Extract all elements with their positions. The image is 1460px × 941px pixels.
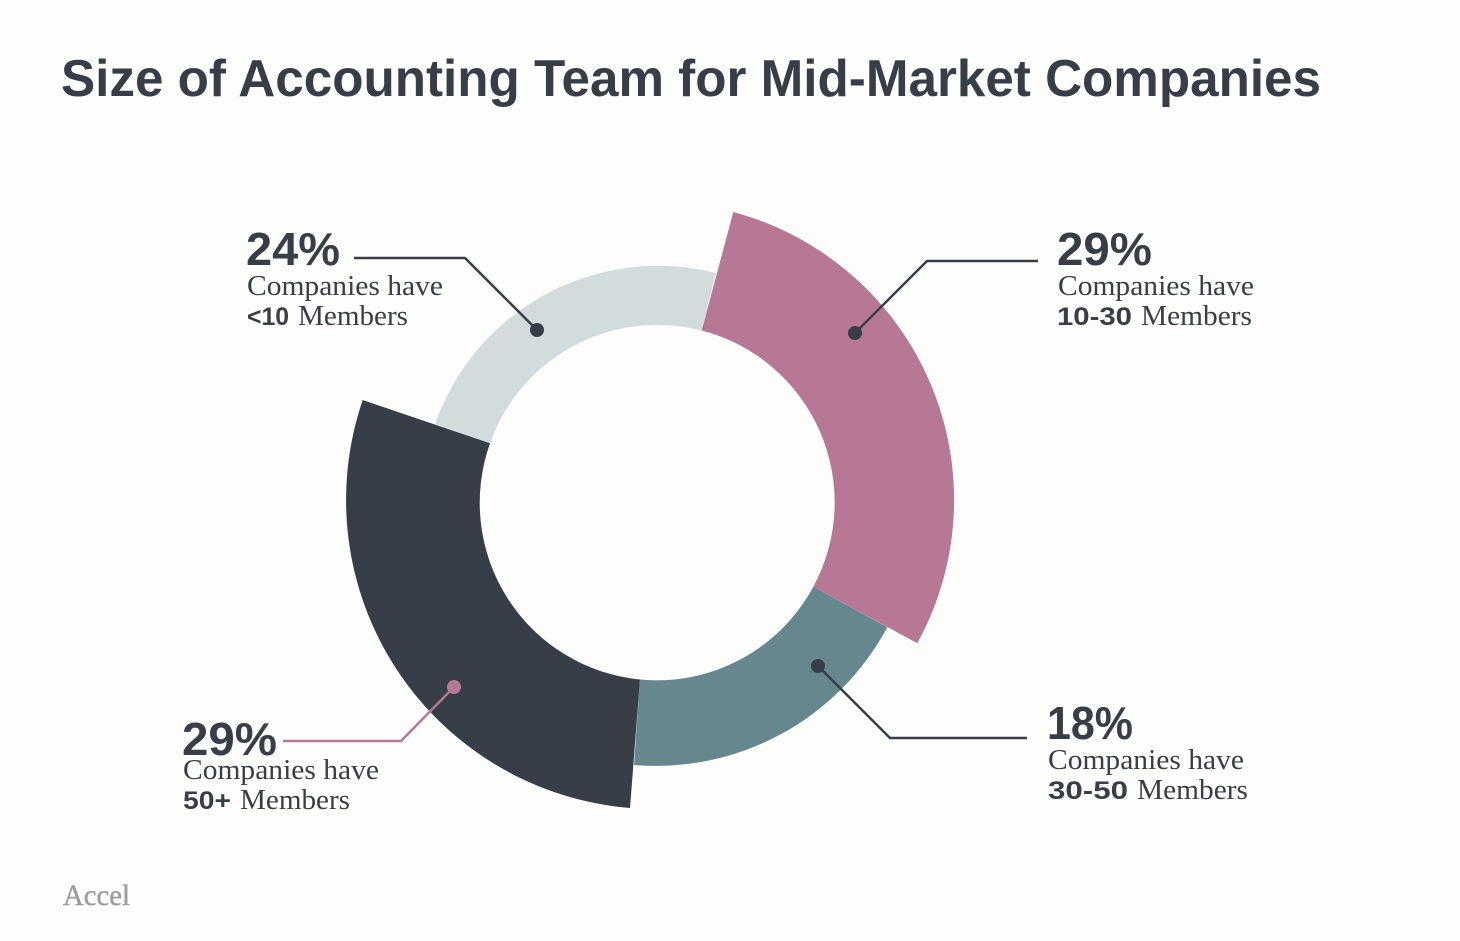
description: 50+ (183, 787, 231, 815)
description (247, 270, 443, 332)
leader line (283, 680, 461, 741)
percentage: 29% (182, 713, 277, 765)
logo: Accel: Accel (63, 879, 130, 912)
callout: 18% 30-50 members (811, 659, 1248, 806)
callout: 24% under 10 members (246, 223, 544, 337)
description (1048, 744, 1248, 806)
segment: under 10 members, 24% (435, 266, 716, 443)
leader line (848, 261, 1038, 340)
leader line (811, 659, 1027, 738)
description: <10 (247, 303, 289, 331)
description: Companies have (1058, 270, 1254, 302)
leader line (354, 258, 544, 337)
description: Members (298, 300, 408, 332)
callout: 29% 50+ members (182, 680, 461, 816)
title: Size of Accounting Team for Mid-Market Companies (61, 50, 1321, 108)
description: Members (240, 784, 350, 816)
description: 30-50 (1048, 777, 1128, 805)
segment: 50+ members, 29% (346, 400, 640, 808)
description: Companies have (183, 754, 379, 786)
description (183, 754, 379, 816)
description (1057, 270, 1254, 332)
percentage: 18% (1047, 697, 1133, 749)
callout: 29% 10-30 members (848, 223, 1254, 340)
percentage: 29% (1057, 223, 1152, 275)
description: 10-30 (1057, 303, 1132, 331)
segment: 30-50 members, 18% (634, 587, 887, 766)
donut chart (346, 212, 954, 808)
description: Companies have (1048, 744, 1244, 776)
segment: 10-30 members, 29% (702, 212, 954, 643)
description: Members (1137, 774, 1248, 806)
description: Members (1141, 300, 1252, 332)
description: Companies have (247, 270, 443, 302)
percentage: 24% (246, 223, 340, 275)
